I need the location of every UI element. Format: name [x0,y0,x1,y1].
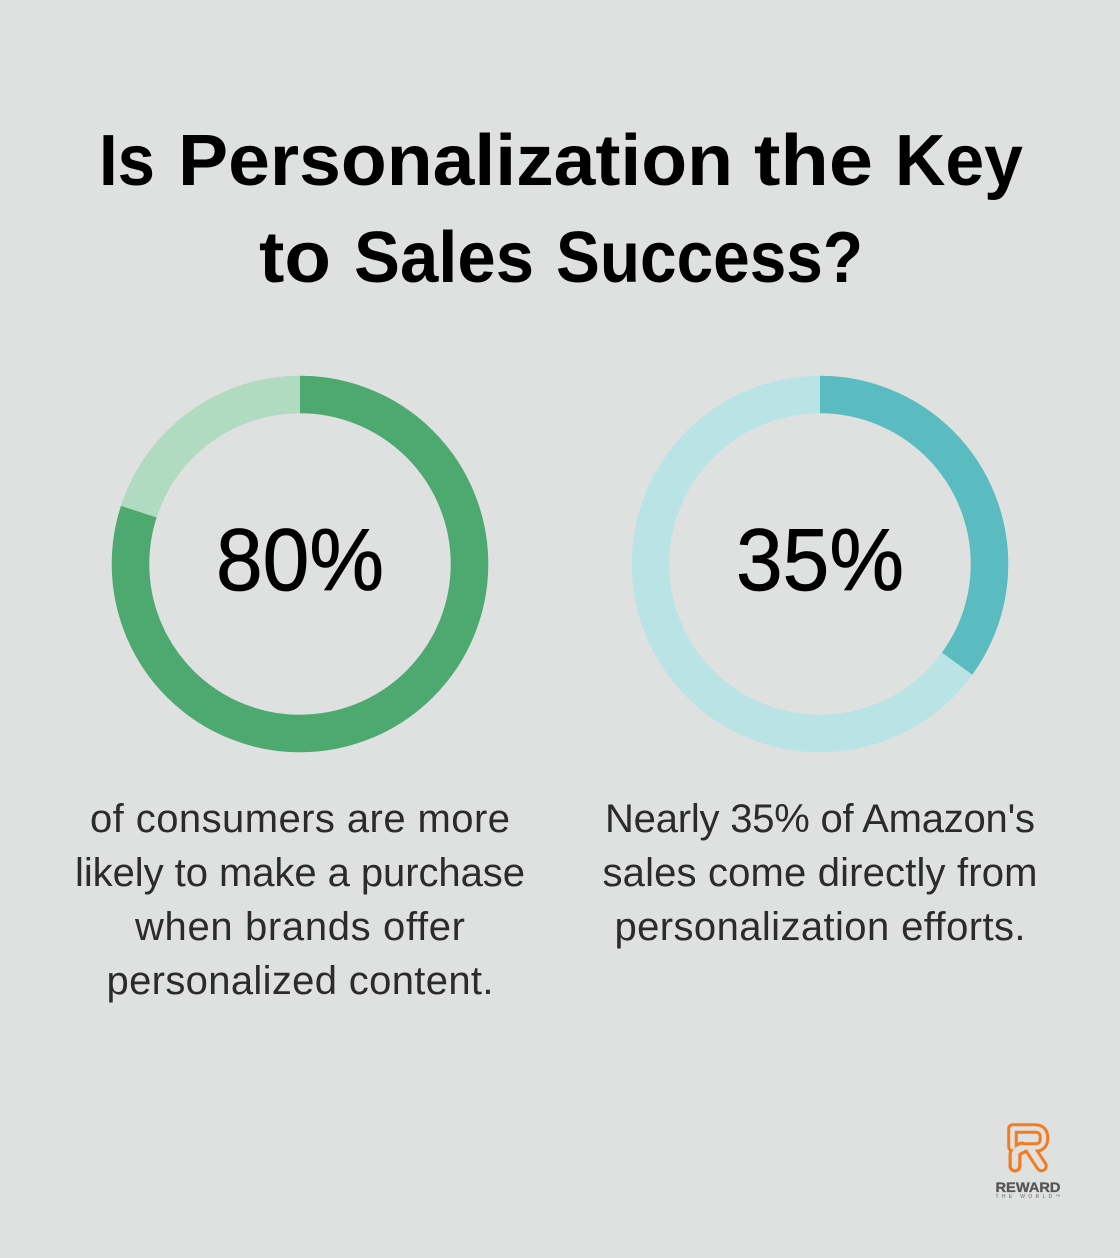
title [99,121,1023,298]
logo wordmark: REWARD [996,1180,1061,1195]
description: 80%: when brands offer [134,905,465,949]
icon: R mark [1012,1128,1044,1166]
title: Success? [556,218,863,298]
title: the [754,121,873,201]
donut chart: 80% [130,394,470,734]
description: 35%: Nearly 35% of Amazon's [605,797,1035,841]
description: 35%: sales come directly from [602,851,1038,895]
value: 80%: 80% [216,510,384,609]
description: 80% [75,797,525,1003]
donut chart: 35% [650,394,990,734]
description: 80%: of consumers are more [90,797,510,841]
description: 80%: personalized content. [106,959,494,1003]
panel: 80% statistic [75,394,525,1003]
description: 80%: likely to make a purchase [75,851,525,895]
title: Personalization [178,121,733,201]
panel: 35% statistic [602,394,1038,949]
description: 35% [602,797,1038,949]
title: Sales [354,218,534,298]
value: 35%: 35% [736,510,904,609]
title: Key [895,121,1023,201]
logo: Reward the World [996,1128,1061,1200]
description: 35%: personalization efforts. [614,905,1026,949]
title: to [259,218,331,298]
title: Is [99,121,155,201]
logo tagline: THE WORLD™ [996,1194,1060,1200]
